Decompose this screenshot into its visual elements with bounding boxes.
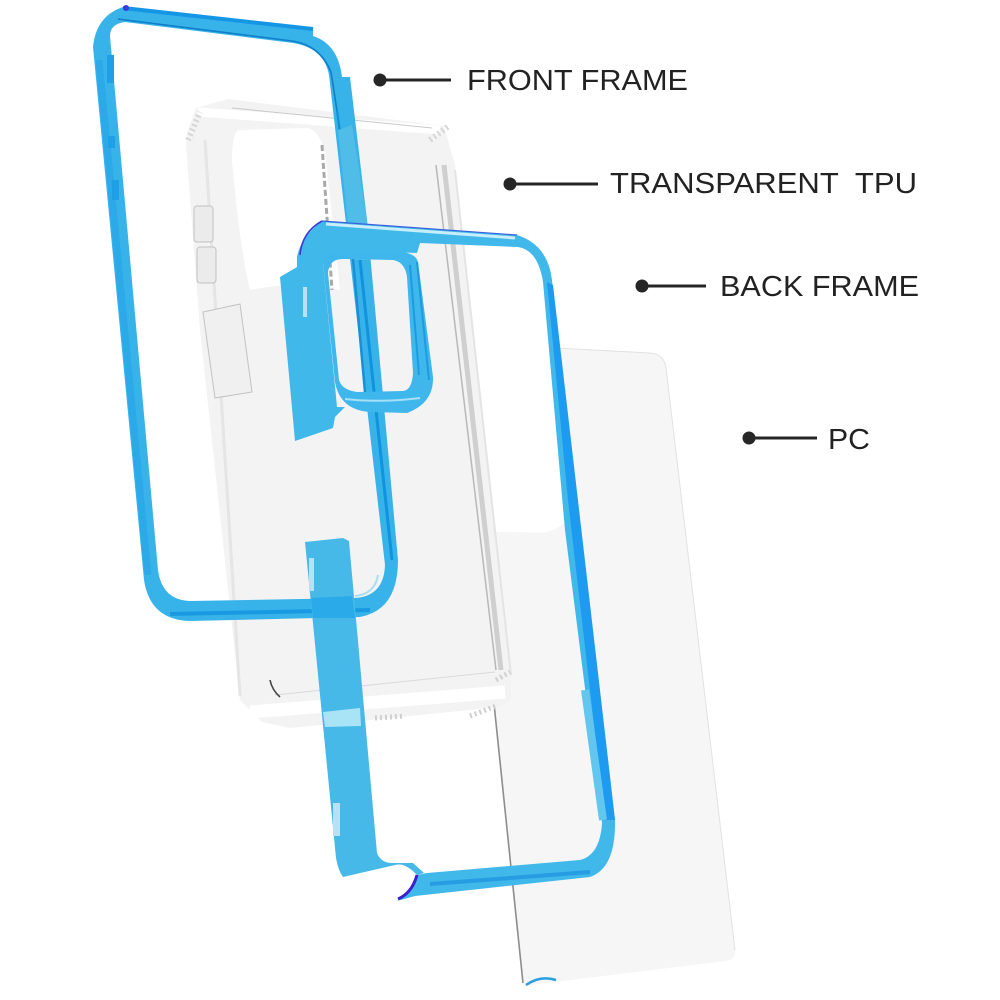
camera ring bbox=[323, 249, 433, 413]
back frame left strip bbox=[305, 538, 424, 877]
right side deep blue bbox=[547, 282, 615, 820]
bottom shadow bbox=[430, 872, 590, 884]
label: front frame: FRONT FRAME bbox=[467, 65, 688, 97]
notches on strip bbox=[303, 287, 340, 836]
label: PC: PC bbox=[828, 424, 870, 456]
front frame bbox=[93, 5, 398, 621]
label: transparent TPU bbox=[504, 168, 917, 200]
label: transparent TPU: TRANSPARENT TPU bbox=[610, 168, 917, 200]
label: PC bbox=[742, 424, 870, 456]
top highlight bbox=[326, 224, 515, 238]
transparent TPU case bbox=[186, 99, 511, 728]
side buttons bbox=[194, 206, 252, 398]
label: front frame bbox=[374, 65, 688, 97]
front frame crossing bbox=[311, 596, 355, 618]
label: back frame bbox=[636, 271, 919, 303]
back frame bbox=[280, 221, 615, 901]
back frame top, right side and bottom with camera block bbox=[280, 221, 615, 901]
label: back frame: BACK FRAME bbox=[720, 271, 919, 303]
PC clear back plate bbox=[477, 348, 735, 985]
